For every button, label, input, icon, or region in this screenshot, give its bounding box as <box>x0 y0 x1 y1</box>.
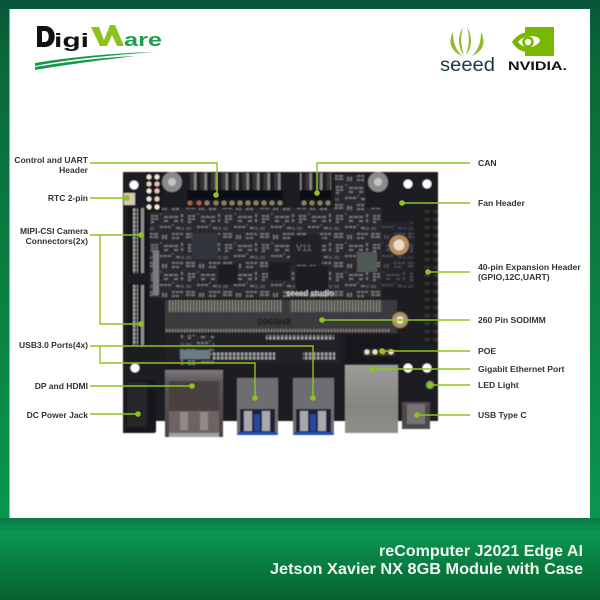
label: 40-pin expansion header: 40-pin Expansion Header <box>478 262 581 272</box>
left labels <box>14 155 89 420</box>
gigabit ethernet port <box>345 365 398 433</box>
LED light <box>426 381 434 389</box>
callout dots <box>124 190 433 418</box>
gold ring bottom <box>392 312 408 328</box>
heatsink chip: V11 <box>296 243 312 253</box>
MIPI-CSI connector 2 <box>128 284 148 346</box>
label: MIPI-CSI camera connectors: MIPI-CSI Camera <box>20 226 88 236</box>
strip beside CSI <box>153 250 159 295</box>
label: USB type C: USB Type C <box>478 410 527 420</box>
label: fan header: Fan Header <box>478 198 525 208</box>
main chip <box>192 233 218 259</box>
MIPI-CSI connector 1 <box>128 208 148 274</box>
USB port 2 <box>293 378 334 435</box>
footer band <box>0 518 600 600</box>
logo: DigiWare <box>35 25 162 70</box>
USB port 1 <box>237 378 278 435</box>
CAN header <box>300 173 331 206</box>
board silkscreen text: seeed studio <box>286 288 334 298</box>
gold ring top <box>389 235 409 255</box>
inductor <box>357 252 377 272</box>
lower component rows <box>165 334 340 364</box>
260 pin SODIMM slot: 0960H8 <box>257 317 291 327</box>
logo: NVIDIA <box>508 27 567 73</box>
secondary chips <box>218 262 390 316</box>
label: gigabit ethernet port: Gigabit Ethernet Port <box>478 364 565 374</box>
product title <box>270 543 583 578</box>
right component field <box>335 175 365 225</box>
260 pin SODIMM slot <box>165 300 397 333</box>
label: RTC 2-pin: RTC 2-pin <box>48 193 88 203</box>
logo: NVIDIA: NVIDIA. <box>508 61 567 73</box>
callout lines <box>90 163 470 415</box>
label: POE: POE <box>478 346 496 356</box>
label: control and UART header: Header <box>59 165 89 175</box>
mounting holes <box>130 180 432 372</box>
label: control and UART header: Control and UART <box>14 155 88 165</box>
label: LED light: LED Light <box>478 380 519 390</box>
circuit board <box>123 172 438 437</box>
right labels <box>478 158 581 420</box>
product title: reComputer J2021 Edge AI <box>379 543 583 560</box>
label: MIPI-CSI camera connectors: Connectors(2x) <box>26 236 88 246</box>
logo: DigiWare: igi <box>54 31 89 52</box>
DC power jack <box>126 380 156 432</box>
product title: Jetson Xavier NX 8GB Module with Case <box>270 561 583 578</box>
POE header <box>363 349 395 356</box>
label: 260 pin SODIMM: 260 Pin SODIMM <box>478 315 546 325</box>
label: DP and HDMI: DP and HDMI <box>35 381 88 391</box>
label: DC power jack: DC Power Jack <box>27 410 88 420</box>
icon: top left pin header <box>146 172 162 212</box>
standoffs <box>162 172 388 192</box>
40-pin expansion header <box>420 205 438 345</box>
label: USB3.0 ports: USB3.0 Ports(4x) <box>19 340 88 350</box>
USB type C port <box>402 402 430 429</box>
RTC connector <box>124 193 135 205</box>
DP and HDMI port <box>165 370 223 437</box>
control and UART header <box>187 173 283 206</box>
label: 40-pin expansion header: (GPIO,12C,UART) <box>478 272 550 282</box>
logo: seeed <box>440 27 495 76</box>
label: CAN: CAN <box>478 158 497 168</box>
component field <box>150 208 382 298</box>
heatsink chip <box>290 235 322 265</box>
logo: DigiWare: are <box>124 30 162 50</box>
logo: seeed: seeed <box>440 55 495 76</box>
board outline <box>123 172 438 433</box>
